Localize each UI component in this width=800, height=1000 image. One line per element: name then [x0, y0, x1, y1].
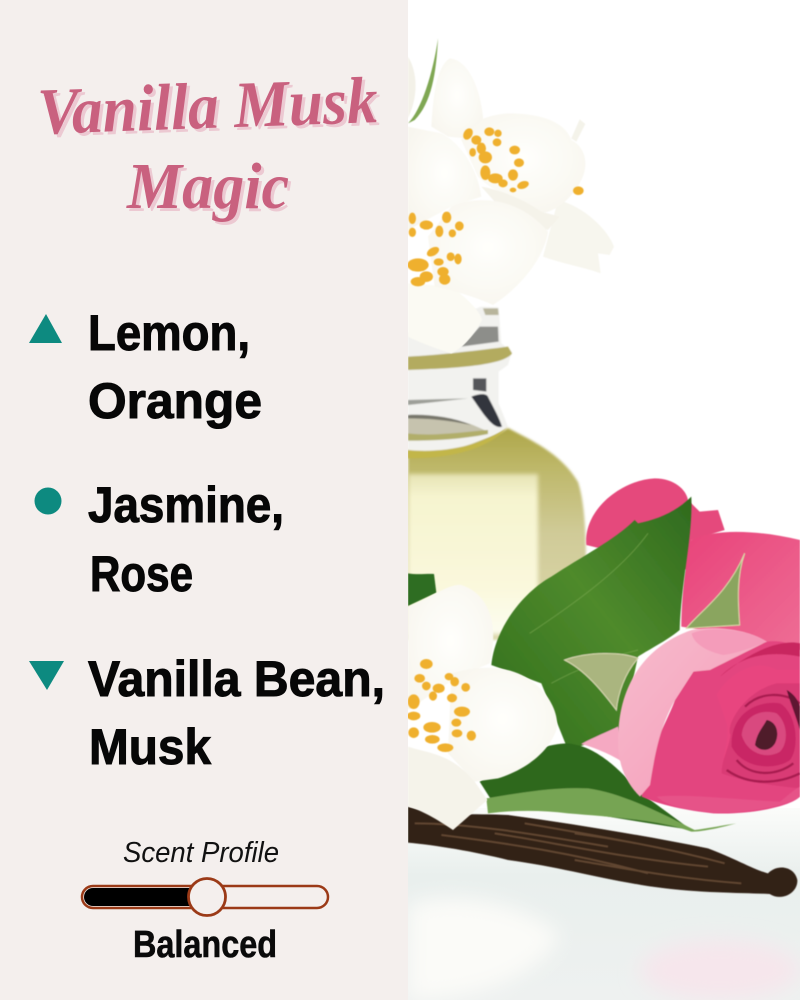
table surface	[408, 808, 800, 1000]
small leaf	[408, 573, 436, 606]
icon: teal down triangle	[29, 661, 64, 690]
title	[36, 64, 382, 226]
middle note text	[88, 477, 284, 602]
slider track	[82, 886, 328, 908]
white flowers at top	[407, 38, 614, 353]
slider knob	[188, 878, 226, 916]
middle note text: Jasmine,	[88, 477, 284, 533]
base note	[29, 651, 385, 775]
slider value: Balanced	[133, 924, 277, 966]
top note text: Orange	[88, 373, 262, 429]
top note text	[88, 305, 262, 429]
slider label: Scent Profile	[123, 837, 279, 869]
panel: left notes column	[0, 0, 408, 1000]
middle note	[34, 477, 284, 602]
jasmine stamens	[407, 659, 476, 752]
loose pink petals	[586, 478, 800, 650]
lower flower stamens	[407, 212, 464, 286]
pink rose	[618, 628, 800, 814]
top note	[29, 305, 262, 429]
middle note text: Rose	[90, 546, 193, 602]
rose inner petals	[717, 666, 800, 780]
scent profile slider	[82, 837, 328, 966]
icon: teal up triangle	[29, 314, 62, 343]
rose swirl centre	[732, 703, 796, 766]
slider fill	[84, 888, 200, 906]
rose outer body	[642, 641, 800, 814]
bottom white flower and vanilla bean	[407, 573, 797, 897]
title: Magic	[129, 153, 292, 226]
title: Vanilla Musk	[39, 67, 382, 152]
base note text: Musk	[89, 719, 211, 775]
table reflection	[408, 898, 800, 1000]
title: Magic	[126, 150, 289, 223]
bottle body with oil	[408, 428, 586, 640]
green stem tip	[408, 38, 438, 123]
white jasmine petals	[408, 585, 557, 830]
upper flower stamens	[461, 127, 584, 195]
icon: teal circle	[34, 488, 62, 514]
perfume bottle	[408, 307, 586, 640]
upper flower petals	[431, 58, 614, 273]
lower flower petals	[408, 127, 560, 353]
top note text: Lemon,	[88, 305, 250, 361]
bottle neck glass	[408, 307, 512, 458]
vanilla bean pod	[408, 807, 797, 897]
panel: photo of perfume ingredients	[407, 0, 800, 1000]
rose petals and leaves	[480, 478, 800, 832]
base note text: Vanilla Bean,	[88, 651, 385, 707]
rose pale outer petal	[618, 628, 767, 797]
green leaves	[480, 497, 736, 832]
title: Vanilla Musk	[36, 64, 379, 149]
base note text	[88, 651, 385, 775]
